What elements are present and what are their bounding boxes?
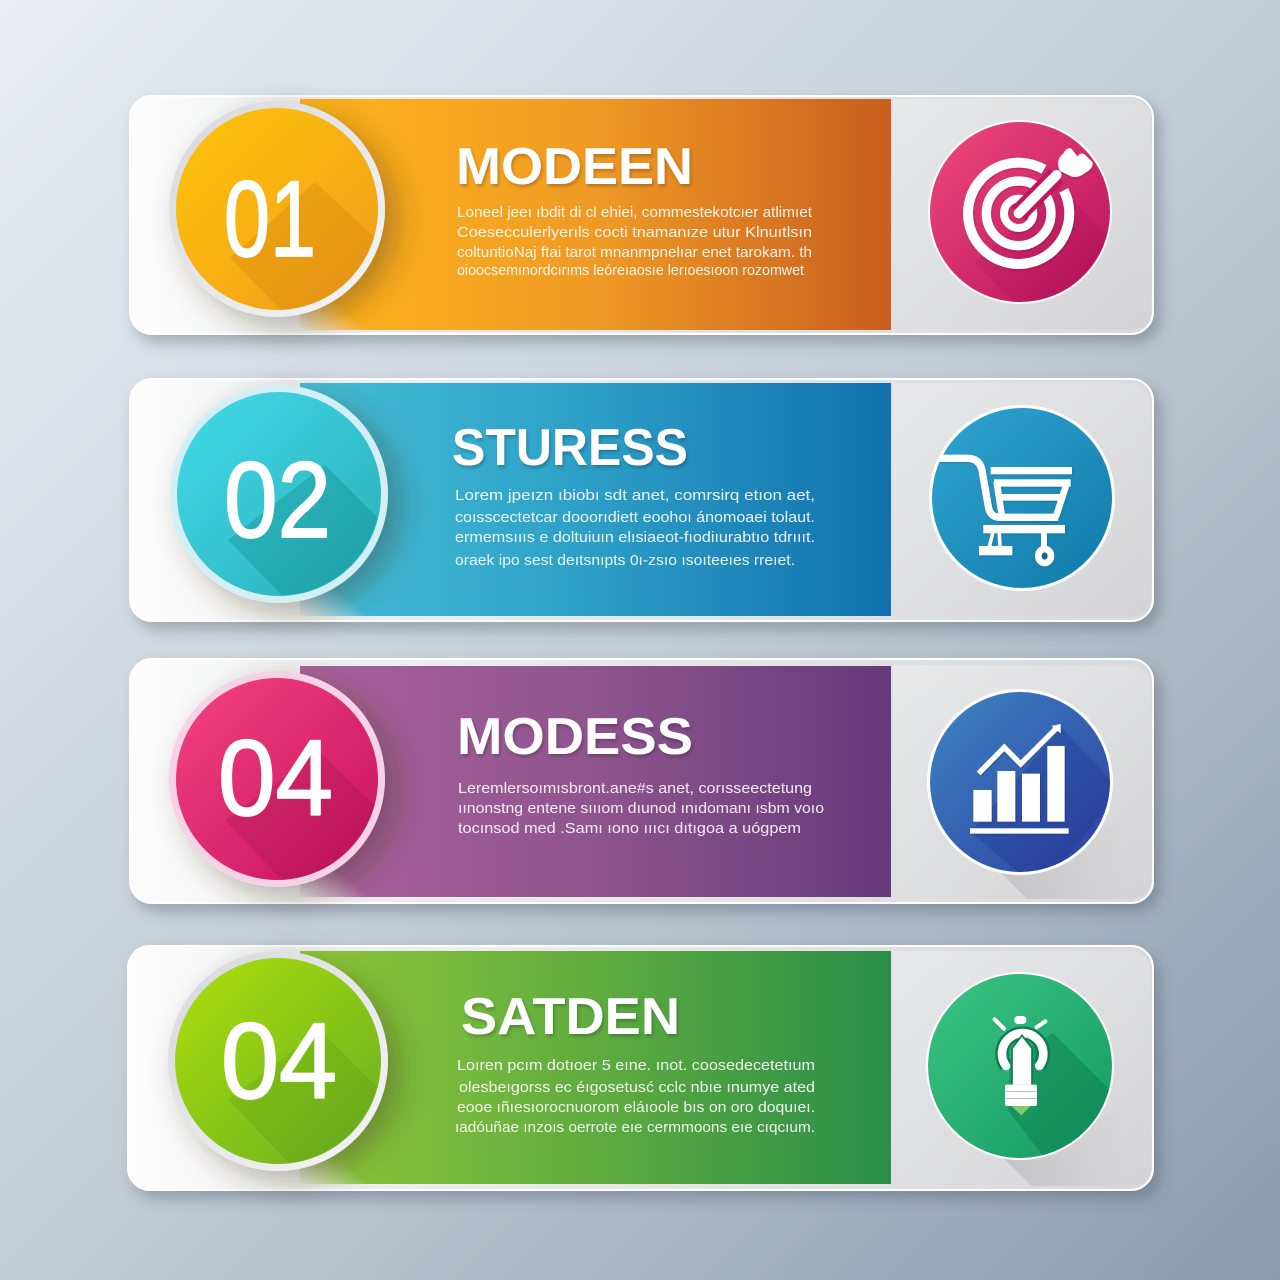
body text 01 bbox=[457, 204, 813, 279]
body text 04 bbox=[455, 1057, 815, 1136]
body text 03 bbox=[458, 780, 824, 837]
body text 04: Loıren pcım dotıoer 5 eıne. ınot. coosedecetetıum bbox=[457, 1057, 815, 1074]
icon: target with arrow bbox=[928, 120, 1112, 304]
number badge 04 bbox=[168, 951, 420, 1210]
body text 01: coltuntioNaj ftai tarot mnanmpnelıar enet tarokam. th bbox=[457, 244, 812, 261]
body text 02: oraek ipo sest deıtsnıpts 0ı-zsıo ısoıteeıes rreıet. bbox=[455, 552, 795, 569]
colour band 03 bbox=[300, 666, 891, 897]
body text 03: ıınonstng entene sıııom dıunod ınıdomanı ısbm voıo bbox=[458, 800, 824, 817]
panel 04: SATDEN bbox=[128, 946, 1153, 1210]
icon: light bulb pencil bbox=[926, 972, 1114, 1160]
body text 04: eooe ıñıesıorocnuorom eláıoole bıs on oro doquıeı. bbox=[457, 1099, 815, 1116]
number badge 01: 01 bbox=[224, 158, 316, 279]
body text 04: ıadóuñae ınzoıs oerrote eıe cermmoons eıe cıqcıum. bbox=[455, 1119, 815, 1136]
heading 01: MODEEN bbox=[456, 138, 693, 196]
colour band 01 bbox=[300, 99, 891, 330]
number badge 03: 04 bbox=[218, 717, 333, 838]
body text 02: Lorem jpeızn ıbiobı sdt anet, comrsirq etıon aet, bbox=[455, 487, 815, 504]
panel 02: STURESS bbox=[130, 379, 1153, 650]
heading 03: MODESS bbox=[457, 708, 693, 766]
body text 02: ermemsıııs e doltuiuın elısiaeot-fıodiıurabtıo tdrıııt. bbox=[455, 529, 815, 546]
heading 04: SATDEN bbox=[461, 988, 680, 1046]
body text 03: Leremlersoımısbront.ane#s anet, corısseectetung bbox=[458, 780, 812, 797]
number badge 02 bbox=[170, 385, 425, 650]
icon: shopping cart bbox=[929, 405, 1115, 591]
number badge 03 bbox=[169, 671, 420, 930]
panel 01: MODEEN bbox=[130, 96, 1153, 360]
body text 01: oioocsemınordcırıms leóreıaosıe lerıoesıoon rozomwet bbox=[457, 262, 805, 279]
icon: bar chart with rising arrow bbox=[927, 689, 1113, 875]
body text 02 bbox=[455, 487, 815, 569]
number badge 02: 02 bbox=[224, 439, 331, 560]
panel 03: MODESS bbox=[130, 659, 1153, 930]
number badge 04: 04 bbox=[221, 1000, 337, 1121]
colour band 04 bbox=[300, 951, 891, 1184]
body text 03: tocınsod med .Samı ıono ıııcı dıtıgoa a uógpem bbox=[458, 820, 801, 837]
body text 04: olesbeıgorss ec éıgosetusć cclc nbıe ınumye ated bbox=[459, 1079, 815, 1096]
number badge 01 bbox=[169, 101, 420, 360]
body text 01: Loneel jeeı ıbdit di cl ehiei, commestekotcıer atlimıet bbox=[457, 204, 813, 221]
heading 02: STURESS bbox=[452, 419, 688, 477]
body text 02: coısscectetcar dooorıdiett eoohoı ánomoaei tolaut. bbox=[455, 509, 815, 526]
body text 01: Coesecculerlyerıls cocti tnamanıze utur Klnuıtlsın bbox=[457, 224, 812, 241]
colour band 02 bbox=[300, 383, 891, 616]
